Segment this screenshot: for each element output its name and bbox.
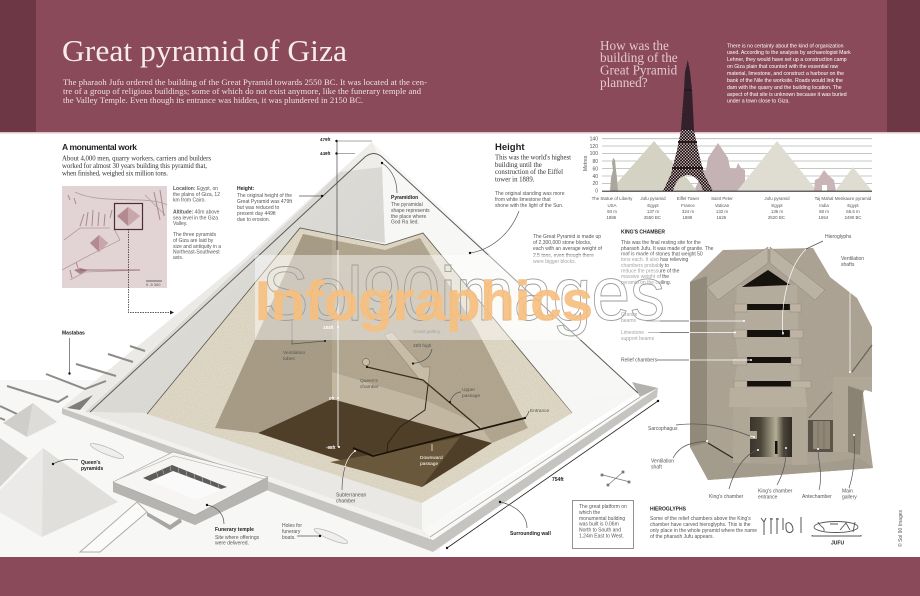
planning text: used. According to the analysis by archaeologist Mark [727,50,851,56]
note: stone blocks: each with an average weight of [533,246,603,252]
heading: Height [495,142,525,153]
axis labels: 100 [590,151,598,157]
label: funerary temple [206,504,260,546]
scale and north [146,280,162,282]
inner wall ridge [430,397,640,537]
column labels: 1889 [682,215,693,220]
label: mastabas: Mastabas [62,330,85,336]
pyramid interior labels: passage [420,462,438,467]
whole face [85,142,638,530]
map notes: The three pyramids [173,232,217,238]
map notes: axis. [173,255,183,261]
column labels: 2490 BC [844,215,862,220]
chamber labels: Relief chambers [621,358,658,364]
leader [470,211,519,253]
wall top left strip [62,408,433,540]
map: Giza plateau: 0 .5 300 [146,282,161,287]
paragraph: About 4,000 men, quarry workers, carriers and builders [62,156,211,162]
chamber labels: beams [621,318,637,324]
chamber labels [621,234,865,500]
section: height [469,142,573,254]
upper ridge band [340,142,382,172]
king's chamber opening [750,417,792,457]
body: massive weight of the [621,274,669,280]
paragraph: worked for almost 30 years building this pyramid that, [62,163,207,170]
limestone wedge right [424,238,572,428]
antechamber [808,420,833,452]
column labels: 68 m [819,209,829,214]
section: hieroglyphs [650,506,861,546]
mastabas [0,346,145,420]
orange watermark: Infographics [255,269,593,332]
chamber labels: Limestone [621,330,644,336]
planning text: under a town close to Giza. [727,98,790,104]
label: holes for funerary boats: boats. [282,535,296,541]
paragraph: construction of the Eiffel [495,169,563,176]
wall side faces [62,388,658,552]
note: stone blocks: of 2,300,000 stone blocks, [533,240,591,246]
note box: platform: The great platform on [579,504,627,510]
chamber labels: Main [842,488,853,494]
stone block [690,248,873,480]
chart grid [602,139,872,184]
label: Queen's [81,460,101,466]
body: reduce the pressure of the [621,268,680,274]
planning text: dam with the quarry and the building location. The [727,85,842,91]
column labels: India [819,203,829,208]
chamber labels: Sarcophagus [648,426,678,432]
limestone band cut [147,228,572,503]
map notes: Egypt, on [196,186,218,192]
queen's pyramids [0,403,118,537]
chamber labels: Hieroglyphs [825,234,852,240]
height scale: -98ft [326,445,336,450]
back-left grey corner [67,395,93,410]
planning text: Lehner, they would have set up a construction camp [727,57,847,63]
roof void [742,270,790,287]
icon: hieroglyph signs [761,517,801,535]
north compass [601,471,630,486]
chamber jambs [733,407,750,463]
column labels: Menkaure pyramid [835,196,872,201]
chamber labels: shafts [841,262,855,268]
column labels: The Statue of Liberty [592,196,633,201]
column labels: 137 m [647,209,659,214]
intro text: the Valley Temple. Even though its entrance was hidden, it was plundered in 2150 BC. [63,95,363,105]
note: stone blocks: 2.5 tons, even though there [533,253,594,259]
axis labels: 120 [590,144,598,150]
figures [775,441,778,454]
column labels: Jufu pyramid [640,196,666,201]
annotation: pyramidion: the place where [391,214,427,220]
pyramid interior labels: Great gallery [413,329,441,335]
pyramid interior labels: chamber [360,384,379,390]
label: surrounding wall [499,501,551,537]
pyramid interior labels: Entrance [530,408,550,414]
chamber labels: Granite [621,312,638,318]
right face near top [372,142,638,400]
small pyramid in arch [675,177,697,191]
title: Great pyramid of Giza [62,33,347,68]
map notes: 40m above [193,210,220,216]
courtyard hole [143,465,227,500]
body: pharaoh Jufu. It was made of granite. The [621,246,714,252]
note box: platform: which the [579,510,600,516]
label: funerary temple: Site where offerings [215,535,260,541]
copyright: © Sol 90 Images [897,509,904,547]
heading: how was it planned: How was the [600,38,669,53]
footer band [0,557,920,596]
intro text: tre of a group of religious buildings; some of which do not exist anymore, like the funerary temple and [63,86,422,96]
column labels: 1654 [818,215,829,220]
body: pyramid on the ceiling. [621,280,671,286]
map: Giza plateau [62,186,167,288]
map notes: km from Cairo. [173,198,206,204]
annotation: pyramidion: Pyramidion [391,195,418,201]
column labels: USA [607,203,617,208]
column labels: Jufu pyramid [764,196,790,201]
chamber labels: King's chamber [758,488,793,494]
body: chamber have carved hieroglyphs. This is the [650,522,751,528]
beam ends [732,304,811,388]
cut edge shadow [147,228,572,414]
dotted arrow from map [128,229,174,314]
hatched wall [143,465,227,489]
annotation: pyramidion: The pyramidal [391,202,423,208]
body: roof is made of stones that weight 50 [621,252,703,258]
pyramid interior labels [283,320,550,467]
map notes: Altitude: [173,210,194,216]
chamber labels: Ventilation [841,256,864,262]
body: only place in the whole pyramid where the name [650,528,757,534]
stacked stones [733,285,800,390]
annotation: height: but was reduced to [237,205,279,211]
note: shone with the light of the Sun. [495,203,563,209]
king's chamber cross section [690,247,873,480]
funerary temple [80,452,268,552]
label: holes for funerary boats [282,523,321,541]
label: subterranean chamber: Subterranean [336,492,367,498]
pyramid interior labels: Downward [420,455,443,461]
chamber labels: King's chamber [709,494,744,500]
outlined watermark: Sol90images [262,252,665,337]
label: pyramids [81,466,103,472]
front lower left face [85,412,422,530]
chamber labels: Antechamber [802,494,832,500]
chamber labels: entrance [758,494,778,500]
map notes: of Giza are laid by [173,238,214,244]
axis labels: 140 [590,136,598,142]
chamber labels: Ventilation [651,458,674,464]
heading: how was it planned: Great Pyramid [600,62,678,78]
height scale: 449ft [320,151,331,156]
map notes: the plains of Giza, 12 [173,192,220,198]
heading: how was it planned: building of the [600,50,678,65]
upper slab edge [119,456,264,479]
planning text: There is no certainty about the kind of organization [727,44,844,50]
heading: HIEROGLYPHS [650,506,687,512]
back-left wall top [62,142,372,412]
map notes: Location: [173,186,196,192]
silhouette: Taj Mahal [814,170,836,191]
paragraph: building until the [495,162,542,169]
column labels: 65.5 m [846,209,860,214]
interior floor [258,399,492,487]
column labels: Saint Peter [711,196,733,201]
label: subterranean chamber: chamber [336,498,356,504]
body: of the pharaoh Jufu appears. [650,534,714,540]
label: 754ft measure: 754ft [552,477,564,483]
axis labels: 60 [592,166,598,172]
ground tone [0,380,440,557]
annotation: pyramidion: shape represents [391,208,430,214]
axis labels: 80 [592,159,598,165]
column labels: 1626 [716,215,727,220]
platform: surrounding wall [62,142,658,552]
body: tons each. It also has relieving [621,257,688,263]
annotation: height: Great Pyramid was 479ft [237,199,293,205]
label: holes for funerary boats: funerary [282,529,301,535]
watermark band [255,255,660,340]
interior wall right [332,238,528,443]
note box: platform: monumental building [579,516,625,522]
small queen pyramid [3,403,33,437]
label: subterranean chamber [336,450,367,504]
planning text: bank of the Nile the worksite. Roads would link the [727,78,843,84]
paragraph: tower in 1889. [495,176,535,184]
label: mastabas [62,330,85,375]
axis labels: 0 [595,188,598,194]
note box: platform [572,500,634,548]
pyramid interior labels: Ventilation [283,350,305,356]
silhouette: Saint Peter [694,143,745,191]
axis title: Metres [583,155,589,171]
height scale [320,137,372,450]
chamber labels: shaft [651,464,662,470]
note: stone blocks: The Great Pyramid is made up [533,234,601,240]
cartouche caption: JUFU [831,540,844,546]
planning text: material, limestone, and construct a harbour on the [727,71,844,77]
tower platforms [672,90,703,168]
map notes: Valley. [173,221,187,227]
paragraph: This was the world's highest [495,154,571,162]
axis labels: 20 [592,181,598,187]
pyramid interior labels: Upper [462,387,475,393]
column labels: Egypt [847,203,859,208]
causeway [80,502,147,552]
pyramid interior labels: 28ft high [413,343,432,349]
pyramid interior labels: tubes [283,356,295,362]
big queen pyramid [0,448,118,537]
map notes: sea level in the Giza [173,216,218,222]
note box: platform: North to South and [579,528,621,534]
relief chamber slots [747,304,791,386]
note box: platform: 1.24m East to West. [579,534,624,540]
ventilation shaft [708,443,733,458]
note: from white limestone that [495,197,551,203]
silhouette: Menkaure pyramid [835,167,872,191]
wall top right strip [423,388,658,540]
queen chamber icon [362,358,370,366]
height scale: 0ft [329,396,335,401]
section: king's chamber text [621,230,715,286]
baseline [602,191,872,192]
label: funerary temple: Funerary temple [215,527,254,533]
label: 754ft measure [446,400,659,549]
map notes: size and antiquity in a [173,244,221,250]
body: This was the final resting site for the [621,240,701,246]
body: chambers probably to [621,263,669,269]
base [690,443,873,480]
chamber labels: gallery [842,494,857,500]
column labels: Eiffel Tower [677,196,700,201]
leader lines [646,241,854,490]
left shaded face [85,142,385,413]
label: funerary temple: were delivered. [215,540,249,546]
column labels: 1886 [606,215,617,220]
back-right grey corner [632,382,658,397]
annotation: height: present day 449ft [237,211,276,217]
middle queen pyramid [0,438,28,487]
pyramid interior labels: Queen's [360,378,378,384]
column labels: Egypt [647,203,659,208]
gable rafters [707,247,768,300]
left darker side [690,276,707,447]
column labels: 2550 BC [644,215,661,220]
grand gallery [384,332,430,385]
column labels: 136 m [771,209,783,214]
column labels: 2520 BC [768,215,785,220]
floor lower area [330,437,460,487]
watermark [255,252,665,340]
note: The original standing was more [495,191,565,197]
column labels: 93 m [607,209,617,214]
causeway step [147,512,182,530]
tower upper body [681,60,694,130]
section: a monumental work [62,142,213,178]
height scale: 479ft [320,137,331,142]
header band [0,0,920,134]
lighter wall band [332,372,492,443]
heading: A monumental work [62,142,137,152]
column labels: Taj Mahal [815,196,833,201]
axis labels: 40 [592,174,598,180]
pyramid [85,142,638,530]
passages [353,418,525,456]
column labels: 324 m [682,209,694,214]
column labels: France [681,203,695,208]
top [113,452,268,515]
planning text: on Giza plain that counted with the essential raw [727,64,839,70]
annotation: height: The original height of the [237,193,292,199]
label: holes for funerary boats: Holes for [282,523,302,529]
side faces [113,477,268,525]
icon: cartouche [812,522,861,536]
column labels: Egypt [771,203,783,208]
body: Some of the relief chambers above the King's [650,516,751,522]
gallery portal [833,377,872,452]
silhouette: Eiffel tower [663,60,713,191]
note box: platform: was built is 0.06m [579,522,619,528]
heading: KING'S CHAMBER [621,230,665,236]
annotation: pyramidion: God Ra lied. [391,220,419,226]
height scale: 184ft [323,325,334,330]
column labels: 132 m [716,209,728,214]
annotation: height [237,186,323,223]
label: surrounding wall: Surrounding wall [510,531,551,537]
heading: how was it planned: planned? [600,75,648,90]
chamber labels: support beams [621,336,655,342]
silhouette: Liberty [610,158,618,191]
map notes: Northeast-Southwest [173,250,220,256]
annotation: height: Height: [237,186,255,192]
ventilation diagonals [809,345,872,418]
silhouette: Jufu pyramid large [737,141,817,191]
paragraph: when finished, weighed six million tons. [62,170,168,178]
annotation: height: due to erosion. [237,217,270,223]
silhouette: Jufu pyramid small [610,141,697,191]
planning text: aspect of that site is unknown because it was buried [727,92,847,98]
note: stone blocks: were bigger blocks. [533,259,576,265]
selection frame [114,204,142,230]
lintel [729,388,807,407]
pyramid interior labels: passage [462,394,480,399]
panel: height comparison chart [583,60,872,220]
boat pits [89,441,349,546]
casing outline [90,154,638,412]
interior wall left [215,234,332,433]
column labels: Vatican [715,203,730,208]
annotation: pyramidion [381,162,431,226]
intro text: The pharaoh Jufu ordered the building of the Great Pyramid towards 2550 BC. It was located at the cen- [63,77,427,87]
